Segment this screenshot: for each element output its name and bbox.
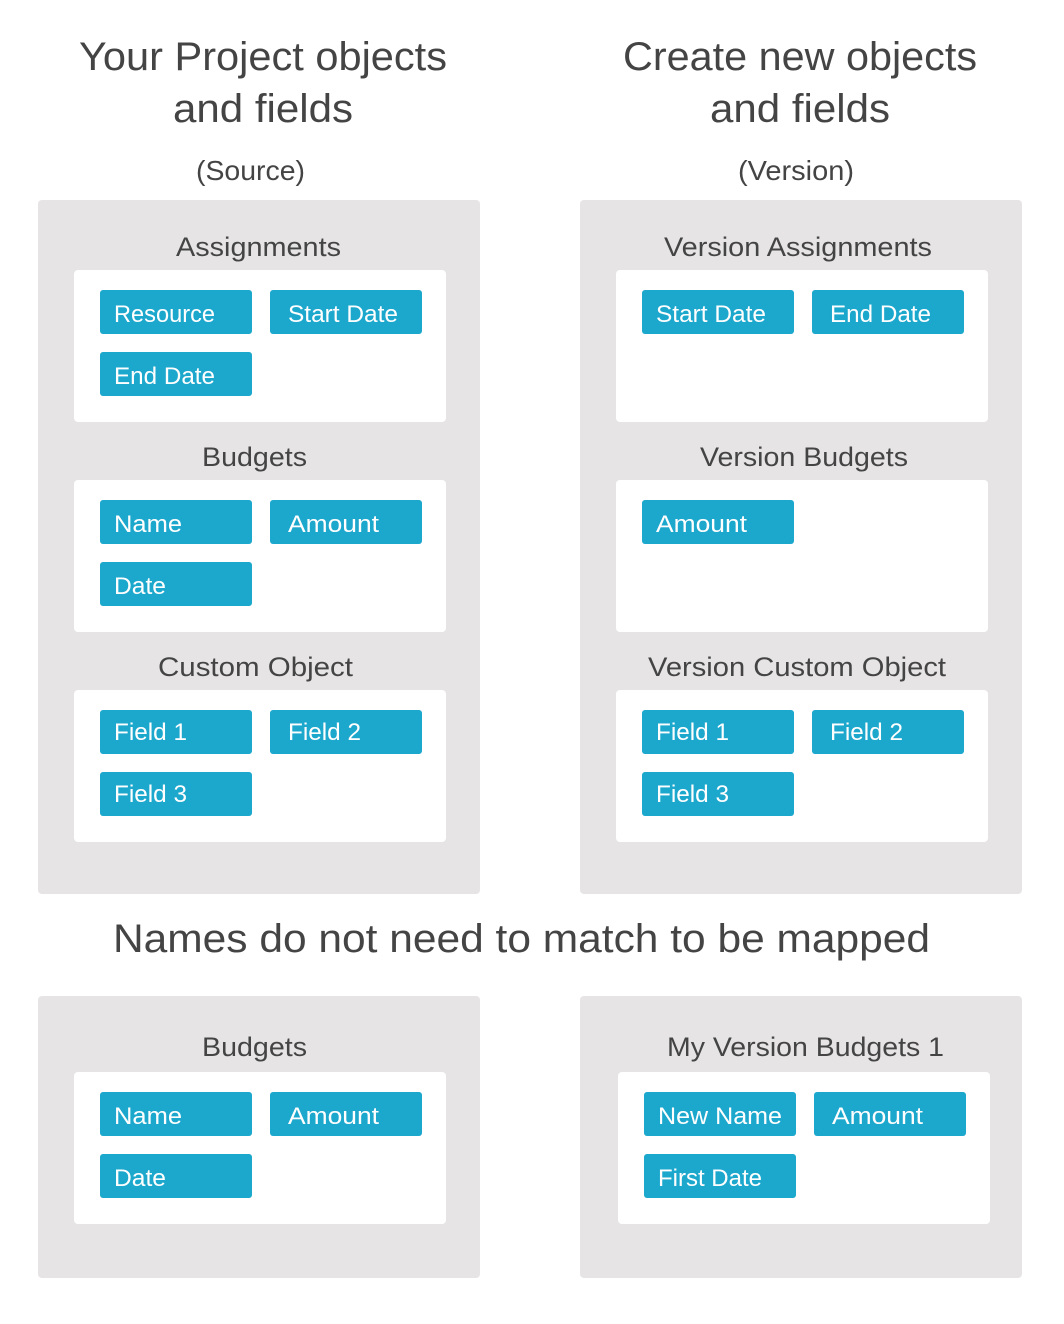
field: field 3 bbox=[100, 772, 252, 816]
heading: budgets: Budgets bbox=[202, 442, 307, 472]
subtitle: source: (Source) bbox=[196, 155, 305, 186]
field: name bbox=[100, 500, 252, 544]
card: version budgets fields bbox=[616, 480, 988, 632]
card: version custom object fields bbox=[616, 690, 988, 842]
field: field 3: Field 3 bbox=[114, 781, 187, 808]
heading: budgets: Budgets bbox=[202, 1032, 307, 1062]
field: field 2 bbox=[270, 710, 422, 754]
title: source: Your Project objects bbox=[79, 35, 447, 79]
heading: version custom object: Version Custom Object bbox=[648, 652, 947, 682]
field: date bbox=[100, 1154, 252, 1198]
field: field 2 bbox=[812, 710, 964, 754]
field: field 1: Field 1 bbox=[114, 719, 187, 746]
field: amount bbox=[270, 500, 422, 544]
card: custom object fields bbox=[74, 690, 446, 842]
field: field 1: Field 1 bbox=[656, 719, 729, 746]
field: name: Name bbox=[114, 511, 182, 538]
field: field 1 bbox=[100, 710, 252, 754]
card: budgets fields bbox=[74, 480, 446, 632]
field: amount bbox=[814, 1092, 966, 1136]
field: field 1 bbox=[642, 710, 794, 754]
field: new name bbox=[644, 1092, 796, 1136]
field: start date bbox=[270, 290, 422, 334]
field: amount: Amount bbox=[288, 511, 379, 538]
field: date: Date bbox=[114, 1165, 166, 1192]
title: source: and fields bbox=[173, 87, 353, 131]
field: date bbox=[100, 562, 252, 606]
card: version assignments fields bbox=[616, 270, 988, 422]
field: end date bbox=[812, 290, 964, 334]
field: amount bbox=[642, 500, 794, 544]
panel: example version budgets bbox=[580, 996, 1022, 1278]
field: amount: Amount bbox=[288, 1103, 379, 1130]
field: end date: End Date bbox=[114, 363, 215, 390]
card: assignments fields bbox=[74, 270, 446, 422]
field: name: Name bbox=[114, 1103, 182, 1130]
heading: names do not need to match: Names do not need to match to be mapped bbox=[113, 917, 930, 961]
heading: assignments: Assignments bbox=[176, 232, 341, 262]
heading: my version budgets 1: My Version Budgets 1 bbox=[667, 1032, 944, 1062]
field: date: Date bbox=[114, 573, 166, 600]
field: field 3 bbox=[642, 772, 794, 816]
card: my version budgets fields bbox=[618, 1072, 990, 1224]
field: name bbox=[100, 1092, 252, 1136]
field: first date bbox=[644, 1154, 796, 1198]
field: start date: Start Date bbox=[288, 301, 398, 328]
field: amount bbox=[270, 1092, 422, 1136]
heading: custom object: Custom Object bbox=[158, 652, 354, 682]
field: field 3: Field 3 bbox=[656, 781, 729, 808]
field: start date: Start Date bbox=[656, 301, 766, 328]
field: start date bbox=[642, 290, 794, 334]
title: version: and fields bbox=[710, 87, 890, 131]
field: field 2: Field 2 bbox=[288, 719, 361, 746]
panel: version objects bbox=[580, 200, 1022, 894]
field: amount: Amount bbox=[656, 511, 747, 538]
title: version bbox=[623, 35, 977, 131]
heading: version budgets: Version Budgets bbox=[700, 442, 908, 472]
field: end date: End Date bbox=[830, 301, 931, 328]
field: resource bbox=[100, 290, 252, 334]
card: budgets fields bbox=[74, 1072, 446, 1224]
heading: version assignments: Version Assignments bbox=[664, 232, 932, 262]
field: amount: Amount bbox=[832, 1103, 923, 1130]
field: end date bbox=[100, 352, 252, 396]
subtitle: version: (Version) bbox=[738, 155, 854, 186]
panel: source objects bbox=[38, 200, 480, 894]
panel: example source budgets bbox=[38, 996, 480, 1278]
field: first date: First Date bbox=[658, 1165, 762, 1192]
title: version: Create new objects bbox=[623, 35, 977, 79]
field: field 2: Field 2 bbox=[830, 719, 903, 746]
title: source bbox=[79, 35, 447, 131]
field: resource: Resource bbox=[114, 301, 215, 328]
field: new name: New Name bbox=[658, 1103, 782, 1130]
